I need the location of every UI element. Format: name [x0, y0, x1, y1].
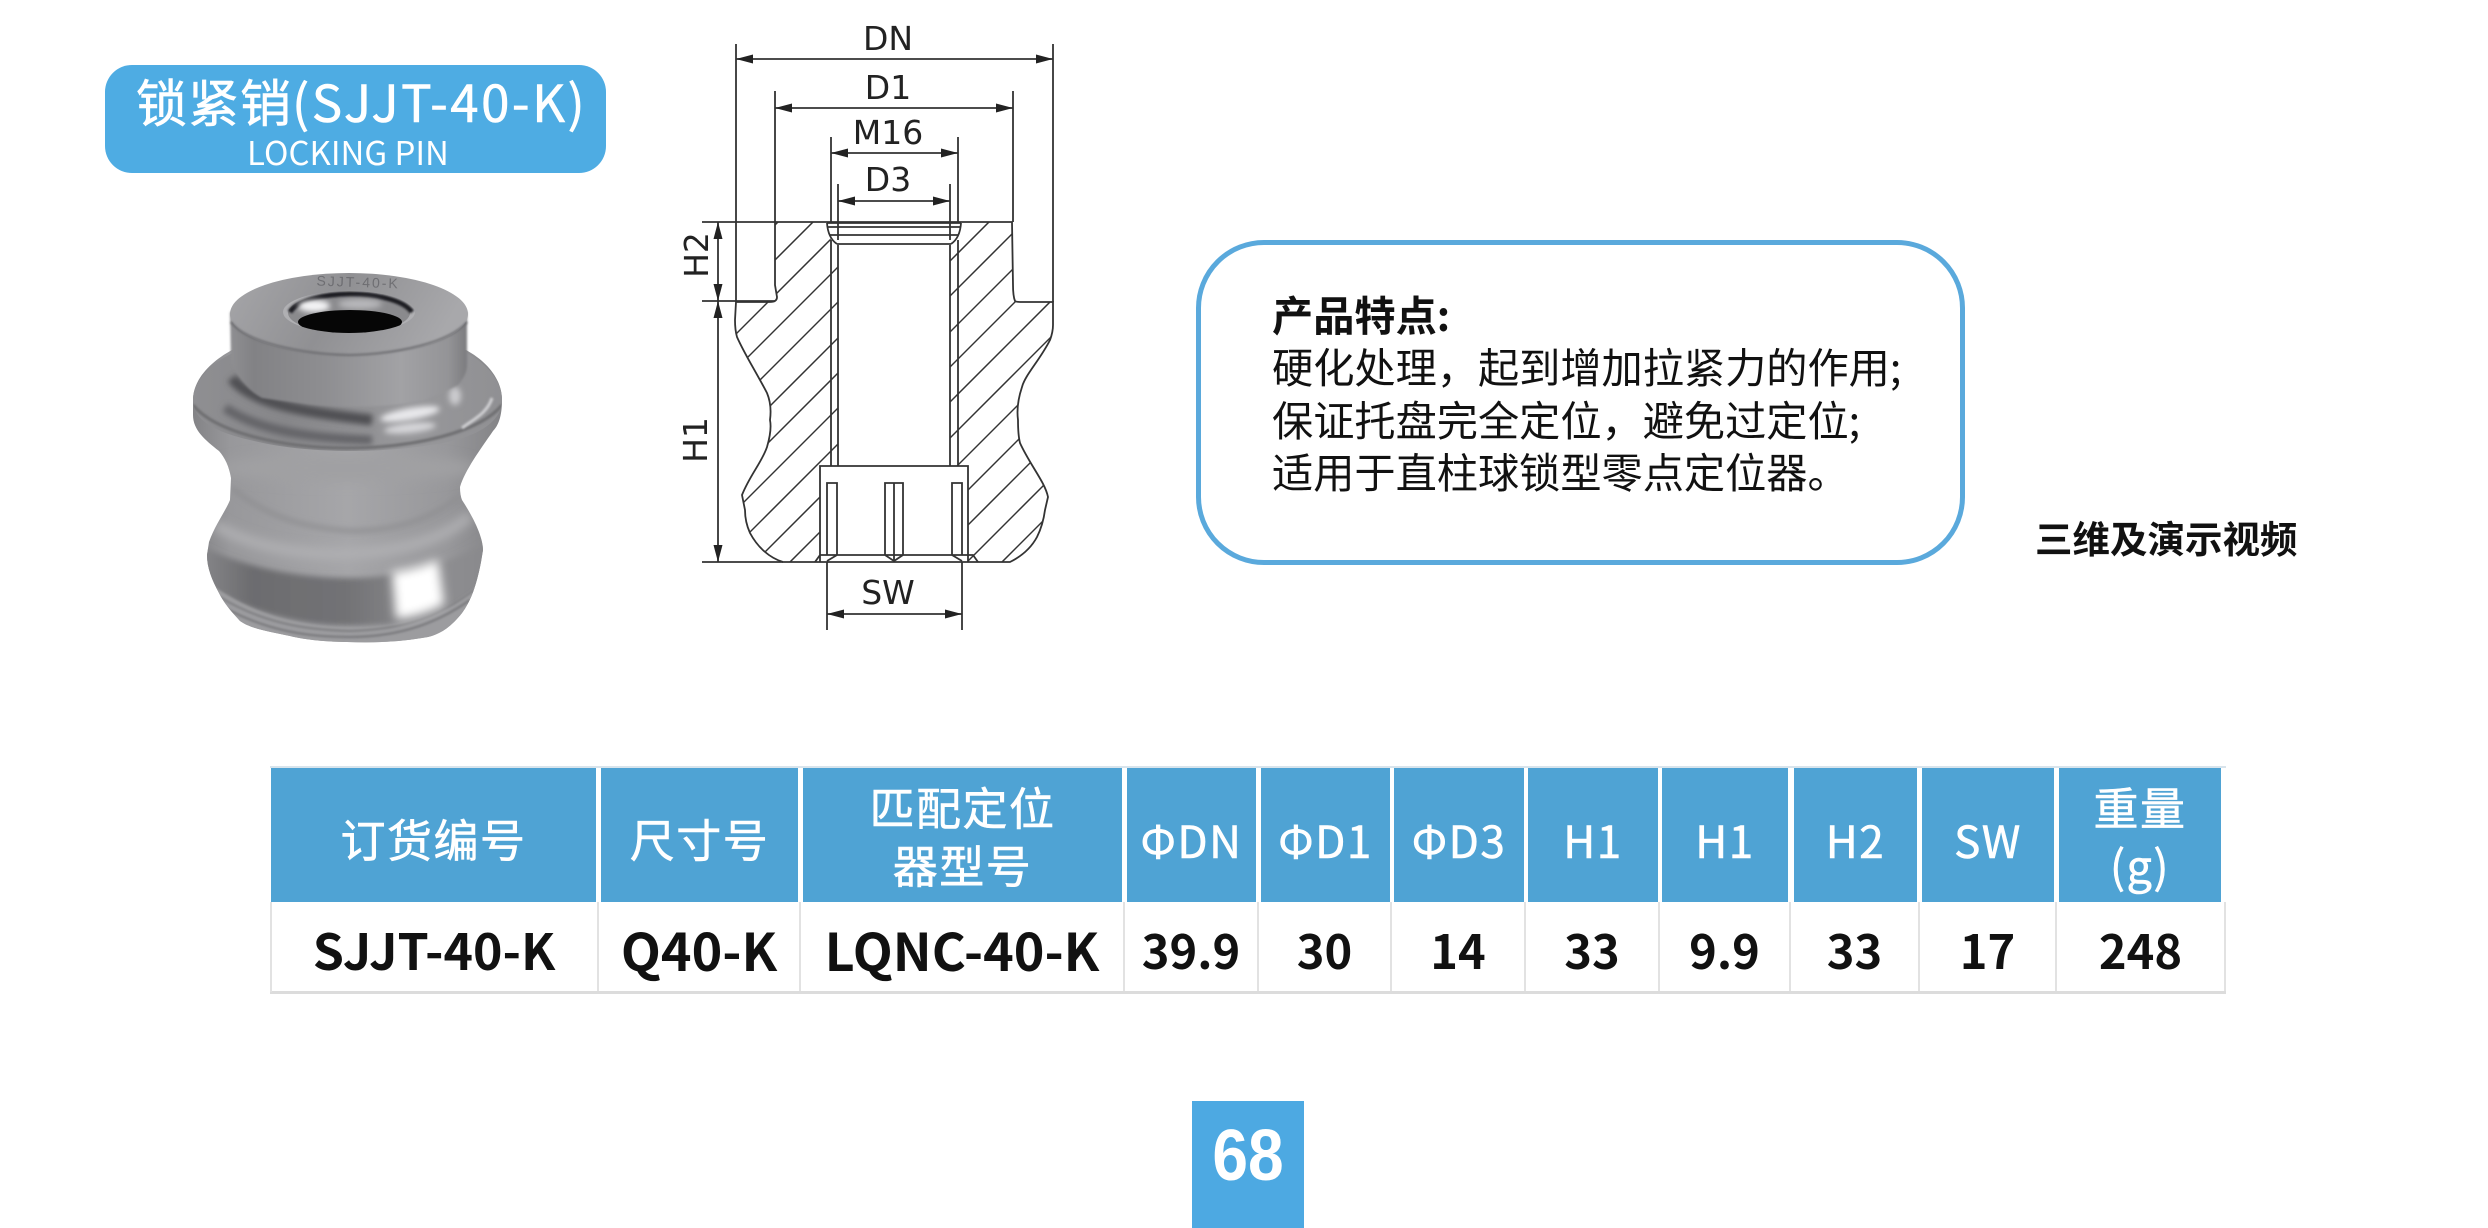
- table header row: ΦDN: [1141, 806, 1242, 870]
- dimension labels: D1: [865, 68, 911, 107]
- table data row: LQNC-40-K: [825, 910, 1099, 986]
- hatching: [736, 222, 1050, 562]
- table data row: 248: [2099, 914, 2182, 983]
- features list: 保证托盘完全定位，避免过定位;: [1272, 388, 1860, 448]
- table header row: [271, 768, 2221, 902]
- dimension and extension lines: [702, 44, 1053, 630]
- dimension labels: H1: [676, 417, 715, 463]
- table header row: ΦD3: [1412, 806, 1506, 870]
- table data row: [313, 902, 2226, 991]
- table data row: Q40-K: [621, 910, 777, 986]
- video label: 三维及演示视频: [2035, 509, 2298, 564]
- panel: product features: [1196, 240, 1965, 565]
- counterbore and slots: [815, 466, 978, 562]
- table header row: H2: [1826, 806, 1885, 870]
- bore lines and thread: [831, 240, 958, 466]
- stamped marking: SJJT-40-K: [316, 273, 400, 291]
- dimension labels: SW: [861, 573, 915, 612]
- product photo: locking pin: [193, 273, 502, 642]
- dimension labels: M16: [853, 113, 923, 152]
- table data row: 33: [1564, 914, 1620, 983]
- page number badge: [1192, 1101, 1304, 1228]
- dimension labels: [676, 19, 923, 612]
- table header row: ΦD1: [1278, 806, 1373, 870]
- flange: [193, 345, 502, 451]
- features heading: 产品特点:: [1272, 283, 1450, 343]
- table header row: H1: [1695, 806, 1755, 870]
- features list: 适用于直柱球锁型零点定位器。: [1272, 440, 1849, 500]
- table data row: 39.9: [1142, 914, 1240, 983]
- specification table: [270, 766, 2226, 994]
- lens glare: [392, 560, 444, 619]
- table header row: 匹配定位: [869, 773, 1056, 838]
- bore: [283, 291, 415, 333]
- table header row: SW: [1954, 806, 2022, 870]
- table header row: 重量: [2093, 773, 2186, 838]
- table header row: 订货编号: [340, 805, 526, 870]
- table data row: 30: [1297, 914, 1352, 983]
- title badge: [105, 65, 606, 173]
- top cylinder: [230, 312, 467, 406]
- section outline: [735, 222, 1053, 562]
- technical section drawing: [682, 26, 1054, 630]
- features list: [1272, 335, 1901, 500]
- table data row: 17: [1960, 914, 2015, 983]
- features list: 硬化处理，起到增加拉紧力的作用;: [1272, 335, 1901, 395]
- page number: 68: [1212, 1116, 1284, 1196]
- dimension labels: H2: [677, 232, 716, 278]
- top face: [230, 273, 468, 355]
- dimension arrows: [714, 54, 1053, 618]
- subtitle: english name: LOCKING PIN: [247, 127, 449, 175]
- dimension labels: D3: [865, 160, 911, 199]
- table data row: 9.9: [1689, 914, 1760, 983]
- table header row: H1: [1563, 806, 1623, 870]
- table header row: 尺寸号: [630, 805, 769, 870]
- title: product name: 锁紧销(SJJT-40-K): [136, 63, 587, 137]
- dimension labels: DN: [863, 19, 913, 58]
- table data row: 14: [1430, 914, 1486, 983]
- table header row: 器型号: [893, 831, 1032, 896]
- table data row: 33: [1827, 914, 1882, 983]
- table data row: SJJT-40-K: [313, 912, 555, 984]
- body silhouette: [193, 350, 502, 642]
- table header row: (g): [2110, 831, 2170, 896]
